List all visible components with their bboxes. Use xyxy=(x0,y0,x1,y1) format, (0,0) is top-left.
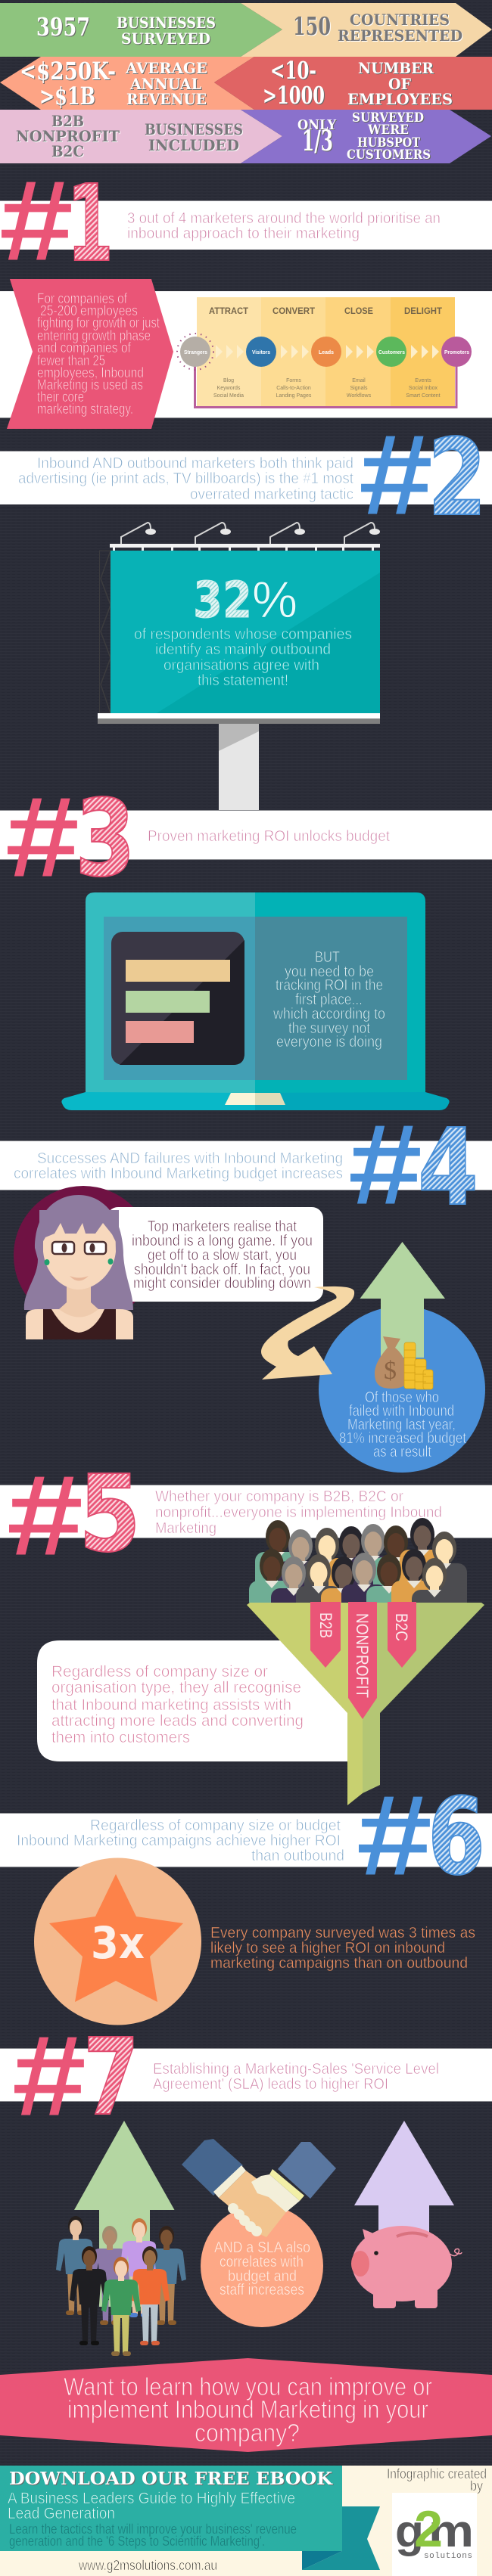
panel: inbound methodology band xyxy=(0,279,492,429)
marketer with speech bubble xyxy=(14,1186,323,1339)
blue circle xyxy=(319,1306,485,1473)
stat: 32 percent: % xyxy=(252,571,297,628)
stat: one third hubspot customers: 1/3 xyxy=(302,124,333,157)
billboard xyxy=(98,523,380,811)
ebook title: A Business Leaders Guide to Highly Effective xyxy=(8,2490,295,2507)
ebook description: Learn the tactics that will improve your business' revenue xyxy=(9,2522,297,2537)
stat: number of employees xyxy=(263,56,453,110)
inbound methodology diagram: Workflows xyxy=(347,393,372,399)
section 1 band xyxy=(0,159,492,286)
white callout bubble: organisation type, they all recognise xyxy=(51,1679,301,1696)
stat copy: likely to see a higher ROI on inbound xyxy=(210,1940,445,1957)
stat: businesses included: NONPROFIT xyxy=(16,127,120,145)
orange circle with star: 3x xyxy=(91,1917,145,1969)
inbound methodology diagram: Leads xyxy=(319,350,334,355)
ROI piggy bank and arrow xyxy=(351,2121,462,2308)
billboard lamps xyxy=(121,523,380,544)
section 5 number: # xyxy=(10,1454,80,1577)
billboard copy: of respondents whose companies xyxy=(134,626,352,643)
g2m logo: g xyxy=(395,2506,424,2556)
g2m logo xyxy=(392,2493,477,2576)
inbound methodology diagram: CONVERT xyxy=(272,307,315,316)
speech bubble xyxy=(107,1207,323,1302)
stat: businesses included xyxy=(0,110,491,163)
stat: one third hubspot customers xyxy=(297,110,431,163)
inbound methodology diagram: Events xyxy=(415,378,431,383)
crowd of people xyxy=(249,1518,467,1603)
icon: handshake xyxy=(182,2139,336,2237)
ribbon: B2B xyxy=(310,1602,341,1668)
laptop copy: you need to be xyxy=(285,964,374,980)
orange circle with star xyxy=(34,1858,201,2025)
section 3 statement: Proven marketing ROI unlocks budget xyxy=(148,828,390,845)
stat: businesses surveyed: 3957 xyxy=(36,12,90,42)
stat: average annual revenue: >$1B xyxy=(39,82,95,110)
ebook heading: DOWNLOAD OUR FREE EBOOK xyxy=(9,2469,333,2489)
inbound methodology diagram: Strangers xyxy=(184,350,207,355)
speech bubble: might consider doubling down xyxy=(133,1275,311,1292)
panel: survey stats arrows xyxy=(0,3,492,163)
stat: average annual revenue: REVENUE xyxy=(126,90,207,108)
section 6 statement: Inbound Marketing campaigns achieve higher ROI xyxy=(17,1833,341,1849)
pink pentagon callout: their core xyxy=(37,390,84,405)
inbound methodology diagram: Social Inbox xyxy=(409,386,438,391)
pink pentagon callout: fewer than 25 xyxy=(37,353,105,369)
icon: money bag and coins: $ xyxy=(384,1357,397,1385)
stat: 32 percent: 32 xyxy=(193,571,252,629)
stat: businesses included: BUSINESSES xyxy=(145,120,243,138)
section 6 statement xyxy=(17,1817,344,1864)
stat: countries represented: COUNTRIES xyxy=(350,11,450,29)
pink pentagon callout: Marketing is used as xyxy=(37,377,143,393)
section 7 number xyxy=(15,2014,139,2140)
section 7 number: # xyxy=(15,2014,83,2137)
laptop base xyxy=(61,1092,450,1110)
laptop copy: the survey not xyxy=(288,1020,370,1037)
billboard frame xyxy=(98,544,380,724)
peach circle xyxy=(201,2205,323,2327)
stat: one third hubspot customers: ONLY xyxy=(297,117,337,133)
section 2 statement: advertising (ie print ads, TV billboards) is the #1 most xyxy=(18,470,353,487)
speech bubble: get off to a slow start, you xyxy=(148,1247,297,1264)
inbound methodology diagram: Blog xyxy=(223,378,234,383)
ribbon: nonprofit xyxy=(348,1602,377,1719)
circle copy: staff increases xyxy=(220,2282,304,2298)
billboard copy: organisations agree with xyxy=(163,657,319,674)
billboard copy: identify as mainly outbound xyxy=(155,641,331,658)
call to action banner: company? xyxy=(195,2419,300,2447)
stat: one third hubspot customers: WERE xyxy=(367,123,409,138)
stat copy: marketing campaigns than on outbound xyxy=(210,1955,468,1972)
icon: curved arrow xyxy=(261,1286,354,1380)
pink pentagon callout: marketing strategy. xyxy=(37,402,133,417)
section 3 number: 3 xyxy=(75,777,135,901)
section 5 number xyxy=(10,1453,141,1577)
SLA handshake circle xyxy=(182,2139,336,2327)
speech bubble: shouldn't back off. In fact, you xyxy=(134,1262,310,1278)
inbound methodology diagram xyxy=(177,297,472,407)
section 1 statement: 3 out of 4 marketers around the world prioritise an xyxy=(127,210,441,227)
section 7 statement: Establishing a Marketing-Sales 'Service Level xyxy=(153,2061,439,2078)
stat: number of employees: NUMBER xyxy=(358,59,434,77)
inbound methodology diagram: Email xyxy=(352,378,366,383)
g2m logo: solutions xyxy=(424,2552,472,2561)
inbound methodology diagram: DELIGHT xyxy=(404,307,442,316)
stat: one third hubspot customers: CUSTOMERS xyxy=(347,147,431,163)
section 4 statement xyxy=(14,1150,343,1182)
laptop copy: tracking ROI in the xyxy=(276,977,383,994)
section 4 statement: Successes AND failures with Inbound Marketing xyxy=(37,1150,343,1167)
section 5 statement: nonprofit...everyone is implementing Inbound xyxy=(155,1504,442,1521)
stat: number of employees: >1000 xyxy=(263,81,325,110)
stat: 32 percent xyxy=(193,571,297,629)
icon: money bag and coins xyxy=(375,1336,433,1389)
circle copy: budget and xyxy=(228,2268,297,2285)
stat: countries represented: REPRESENTED xyxy=(338,26,462,45)
circle copy: as a result xyxy=(373,1444,431,1460)
billboard pole xyxy=(219,724,259,811)
staff increase arrow and team xyxy=(56,2121,186,2356)
billboard copy xyxy=(134,626,352,689)
pink pentagon callout: For companies of xyxy=(37,291,128,307)
stat: one third hubspot customers: SURVEYED xyxy=(352,110,424,126)
laptop copy: first place... xyxy=(295,992,363,1008)
speech bubble: Top marketers realise that xyxy=(148,1218,297,1235)
section 7 statement: Agreement' (SLA) leads to higher ROI xyxy=(153,2076,388,2093)
section 3 number: # xyxy=(8,775,76,898)
stat: average annual revenue: <$250K- xyxy=(20,57,116,85)
section 2 number: # xyxy=(362,413,430,536)
call to action banner: implement Inbound Marketing in your xyxy=(67,2395,428,2423)
ebook title: Lead Generation xyxy=(8,2505,115,2522)
ebook description xyxy=(9,2522,297,2549)
section 6 band xyxy=(0,1813,492,1867)
ebook title xyxy=(8,2490,295,2522)
laptop copy: BUT xyxy=(315,949,340,966)
stat: number of employees: <10- xyxy=(270,56,316,85)
ribbon: B2B: B2B xyxy=(316,1612,335,1638)
stat: number of employees: OF xyxy=(388,75,411,93)
inbound methodology diagram: Keywords xyxy=(217,386,241,391)
circle copy xyxy=(214,2239,310,2298)
pink pentagon callout: 25-200 employees xyxy=(40,303,138,319)
call to action banner: Want to learn how you can improve or xyxy=(64,2373,432,2401)
team of people xyxy=(56,2216,186,2356)
section 6 number xyxy=(360,1774,485,1899)
stat: businesses included: B2B xyxy=(51,112,84,130)
ebook description: generation and the '6 Steps to Scientific Marketing'. xyxy=(9,2534,265,2549)
website url: www.g2msolutions.com.au xyxy=(78,2558,217,2573)
green up arrow xyxy=(74,2121,174,2307)
stat: businesses surveyed xyxy=(0,3,492,57)
green up arrow xyxy=(360,1242,445,1358)
section 1 number: # xyxy=(2,159,70,282)
section 6 statement: Regardless of company size or budget xyxy=(90,1817,341,1834)
circle copy: Of those who xyxy=(365,1389,439,1406)
section 2 band xyxy=(0,413,492,540)
inbound methodology diagram: Visitors xyxy=(252,350,270,355)
inbound methodology diagram: Signals xyxy=(350,386,368,391)
section 4 band xyxy=(0,1103,492,1230)
section 7 band xyxy=(0,2014,492,2140)
section 3 number xyxy=(8,775,135,901)
stat copy xyxy=(210,1925,475,1972)
inbound methodology diagram: CLOSE xyxy=(344,307,373,316)
circle copy: AND a SLA also xyxy=(214,2239,310,2256)
laptop copy xyxy=(272,949,385,1051)
stat: average annual revenue: AVERAGE xyxy=(125,59,207,77)
section 5 number: 5 xyxy=(79,1453,141,1576)
inbound methodology diagram: Smart Content xyxy=(406,393,441,399)
inbound methodology diagram: Calls-to-Action xyxy=(276,386,311,391)
stat: countries represented: 150 xyxy=(293,11,331,41)
section 4 number: 4 xyxy=(418,1106,478,1230)
stat: three times higher ROI xyxy=(34,1858,475,2025)
white callout bubble: attracting more leads and converting xyxy=(51,1712,304,1730)
pink pentagon callout xyxy=(7,279,173,429)
section 2 statement: Inbound AND outbound marketers both think paid xyxy=(37,455,353,472)
stat: number of employees: EMPLOYEES xyxy=(347,90,453,108)
section 6 number: # xyxy=(360,1774,429,1897)
pink pentagon callout: and companies of xyxy=(37,340,132,356)
section 5 statement: Marketing xyxy=(155,1520,216,1537)
stat: businesses included: INCLUDED xyxy=(148,136,239,154)
ribbon: B2C: B2C xyxy=(392,1613,411,1641)
inbound methodology diagram: Landing Pages xyxy=(276,393,312,399)
section 3 band xyxy=(0,775,492,901)
stat: businesses surveyed: BUSINESSES xyxy=(117,14,216,32)
circle copy: failed with Inbound xyxy=(349,1403,454,1420)
circle copy xyxy=(339,1389,466,1460)
laptop copy: which according to xyxy=(272,1006,385,1023)
maroon circle xyxy=(14,1186,153,1325)
pink pentagon callout: employees, Inbound xyxy=(37,365,144,381)
circle copy: 81% increased budget xyxy=(339,1430,466,1447)
inbound methodology diagram: Promoters xyxy=(444,350,469,355)
section 5 statement xyxy=(155,1488,442,1537)
billboard copy: this statement! xyxy=(198,672,288,689)
section 5 statement: Whether your company is B2B, B2C or xyxy=(155,1488,403,1505)
g2m logo: m xyxy=(428,2506,474,2556)
bar chart tablet xyxy=(111,932,244,1065)
inbound methodology diagram: ATTRACT xyxy=(209,307,248,316)
billboard panel xyxy=(111,551,380,713)
stat: average annual revenue: ANNUAL xyxy=(129,75,201,93)
g2m logo: 2 xyxy=(414,2500,443,2558)
credit text xyxy=(387,2466,487,2494)
purple up arrow xyxy=(354,2121,454,2239)
stat: businesses surveyed: SURVEYED xyxy=(121,29,210,48)
circle copy: Marketing last year, xyxy=(347,1417,456,1433)
inbound methodology diagram: Customers xyxy=(378,350,405,355)
white callout bubble: them into customers xyxy=(51,1729,190,1746)
funnel xyxy=(247,1602,484,1805)
section 5 band xyxy=(0,1453,492,1577)
section 7 number: 7 xyxy=(83,2016,139,2140)
ribbon: B2C xyxy=(388,1602,416,1668)
stat: businesses included: B2C xyxy=(51,142,84,160)
section 4 number: # xyxy=(351,1103,419,1226)
stat: one third hubspot customers: HUBSPOT xyxy=(357,135,420,151)
call to action banner xyxy=(0,2358,492,2452)
ribbon: nonprofit: NONPROFIT xyxy=(353,1613,372,1698)
stat: countries represented xyxy=(293,11,462,45)
laptop lid xyxy=(86,892,425,1094)
budget increase circle and arrow xyxy=(261,1242,485,1473)
laptop xyxy=(61,892,450,1110)
inbound methodology diagram: Social Media xyxy=(213,393,244,399)
pink pentagon callout: fighting for growth or just xyxy=(37,315,160,331)
white callout bubble xyxy=(37,1640,347,1761)
inbound methodology diagram: Forms xyxy=(286,378,301,383)
section 6 statement: than outbound xyxy=(251,1848,344,1864)
pink pentagon callout: entering growth phase xyxy=(37,328,151,344)
section 2 statement: overrated marketing tactic xyxy=(190,486,353,503)
section 2 statement xyxy=(18,455,353,503)
stat: average annual revenue xyxy=(0,57,492,110)
white callout bubble: that Inbound marketing assists with xyxy=(51,1696,291,1714)
woman avatar xyxy=(24,1195,133,1339)
section 4 number xyxy=(351,1103,478,1230)
section 2 number xyxy=(362,413,487,540)
laptop copy: everyone is doing xyxy=(276,1034,382,1051)
section 1 statement xyxy=(127,210,441,242)
ebook ribbon xyxy=(0,2466,380,2570)
section 1 statement: inbound approach to their marketing xyxy=(127,225,360,242)
icon: piggy bank xyxy=(351,2226,462,2308)
section 1 number xyxy=(2,159,114,286)
stat copy: Every company surveyed was 3 times as xyxy=(210,1925,475,1941)
credit text: by xyxy=(470,2478,483,2494)
section 4 statement: correlates with Inbound Marketing budget increases xyxy=(14,1165,343,1182)
speech bubble: inbound is a long game. If you xyxy=(132,1233,313,1249)
section 1 number: 1 xyxy=(67,163,114,286)
section 7 statement xyxy=(153,2061,439,2093)
footer xyxy=(0,2466,492,2576)
circle copy: correlates with xyxy=(220,2254,304,2270)
white callout bubble: Regardless of company size or xyxy=(51,1663,268,1681)
